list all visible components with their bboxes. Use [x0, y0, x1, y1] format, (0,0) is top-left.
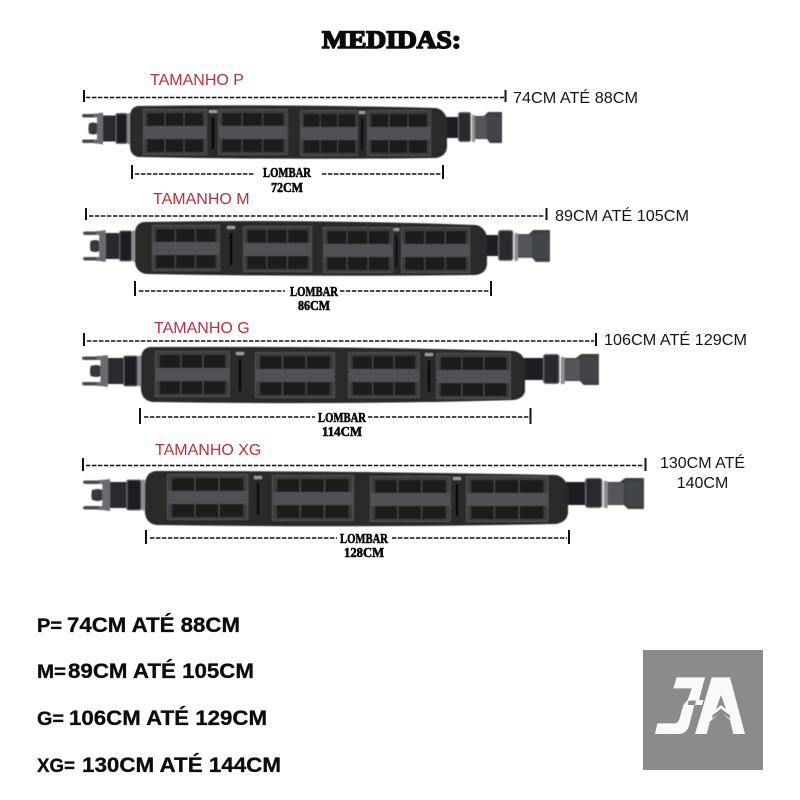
total length label XG: 130CM ATÉ: [660, 453, 745, 472]
panel: tamanho XG: [83, 442, 745, 560]
lombar label G: LOMBAR: [318, 410, 366, 425]
size line M: M=: [37, 662, 66, 683]
total length dimension line M: [86, 208, 546, 220]
heading: tamanho G: TAMANHO G: [154, 320, 250, 337]
belt photo XG: [83, 471, 644, 526]
panel: tamanho G: [82, 320, 747, 439]
logo: JA: [643, 650, 763, 770]
lombar label XG: 128CM: [344, 545, 384, 560]
size line G: G=: [37, 709, 64, 730]
lombar label G: 114CM: [322, 424, 362, 439]
lombar dimension line M: [135, 281, 491, 296]
total length label XG: [660, 453, 745, 492]
heading: tamanho M: TAMANHO M: [153, 191, 250, 208]
lombar dimension line P: [132, 165, 443, 179]
lombar label P: LOMBAR: [263, 165, 311, 180]
lombar label M: 86CM: [298, 298, 330, 313]
total length label P: 74CM ATÉ 88CM: [513, 88, 638, 107]
lombar label G: [318, 410, 366, 439]
total length label XG: 140CM: [677, 475, 728, 492]
belt photo P: [82, 105, 502, 159]
lombar dimension line G: [140, 408, 530, 424]
heading: tamanho P: TAMANHO P: [150, 72, 244, 89]
heading: tamanho XG: TAMANHO XG: [155, 442, 261, 459]
size line G: 106CM ATÉ 129CM: [69, 707, 267, 730]
lombar label M: LOMBAR: [290, 284, 338, 299]
total length label M: 89CM ATÉ 105CM: [555, 206, 689, 225]
total length label G: 106CM ATÉ 129CM: [604, 330, 747, 349]
size line P: P=: [37, 616, 62, 637]
size line M: 89CM ATÉ 105CM: [68, 660, 254, 683]
total length dimension line XG: [83, 458, 646, 471]
size summary list: [37, 614, 281, 777]
lombar label M: [290, 284, 338, 313]
size line XG: XG=: [37, 756, 75, 777]
size line XG: 130CM ATÉ 144CM: [82, 754, 281, 777]
title: MEDIDAS:: [322, 27, 461, 54]
belt photo G: [82, 347, 599, 403]
size line P: 74CM ATÉ 88CM: [67, 614, 240, 637]
total length dimension line P: [84, 90, 506, 102]
lombar label XG: [340, 531, 388, 560]
panel: tamanho M: [83, 191, 689, 313]
lombar dimension line XG: [146, 530, 569, 544]
total length dimension line G: [84, 333, 596, 346]
belt photo M: [83, 221, 550, 276]
lombar label P: [263, 165, 311, 195]
panel: tamanho P: [82, 72, 638, 195]
lombar label XG: LOMBAR: [340, 531, 388, 546]
lombar label P: 72CM: [271, 180, 303, 195]
